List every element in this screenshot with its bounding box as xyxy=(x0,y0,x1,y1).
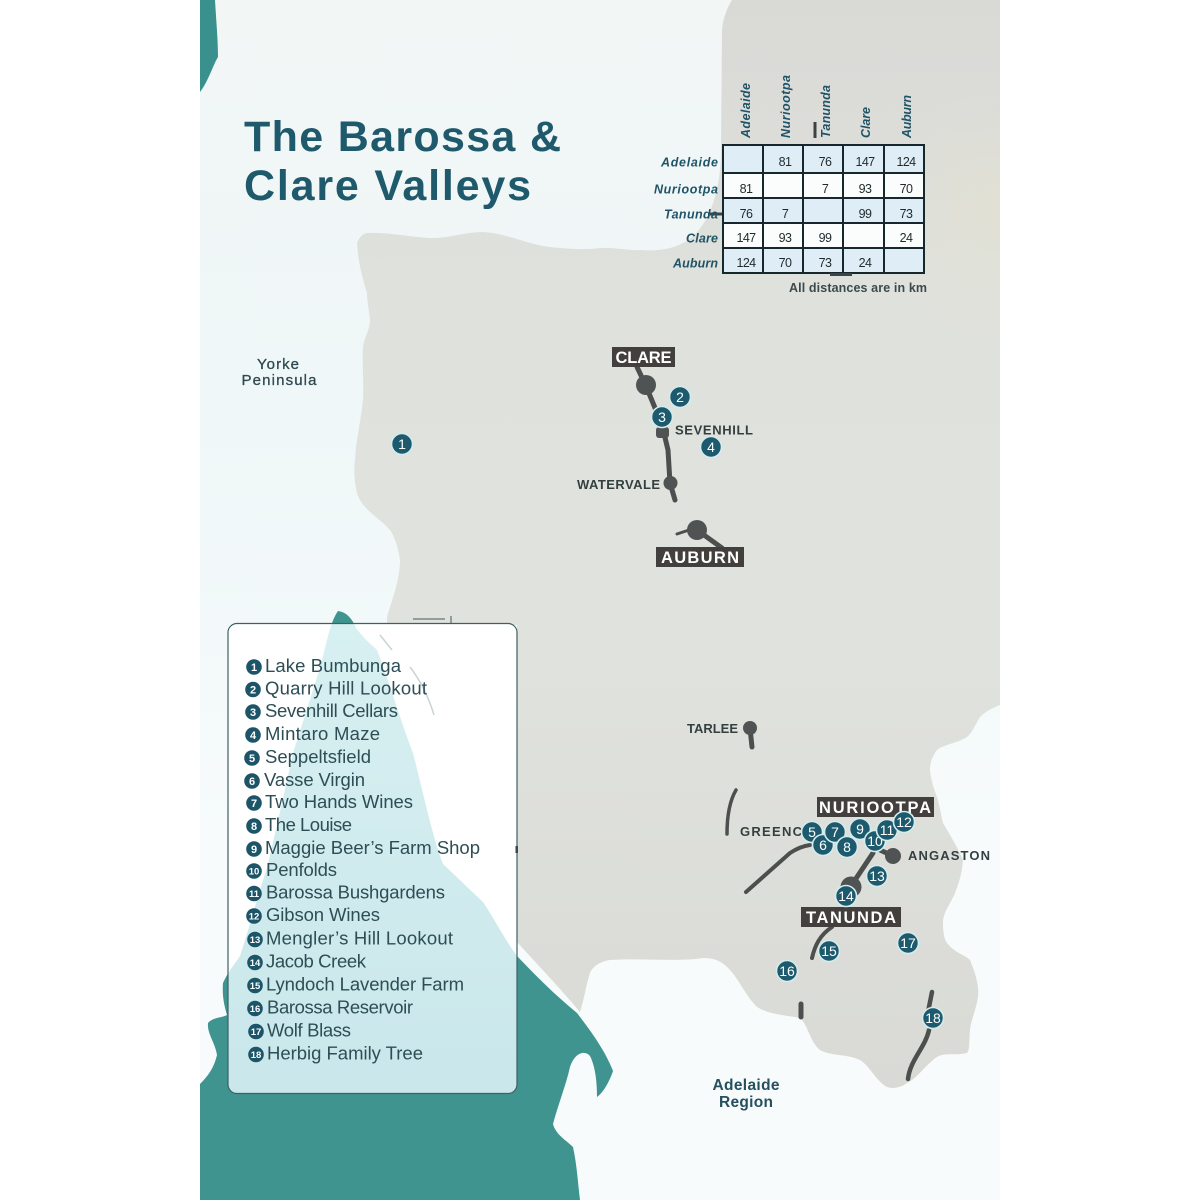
marker 18 xyxy=(922,1008,944,1028)
marker 13: 13 xyxy=(869,868,885,884)
legend item 8: The Louise xyxy=(265,814,352,835)
table values: 73 xyxy=(900,207,913,221)
legend item 17: 17 xyxy=(251,1027,261,1038)
beige tint on the land's right edge xyxy=(880,85,1120,345)
table values: 124 xyxy=(736,256,756,270)
legend item 18: Herbig Family Tree xyxy=(267,1042,423,1064)
marker 13 xyxy=(866,866,888,886)
marker 8 xyxy=(836,836,858,858)
column headers xyxy=(739,75,914,139)
table values: 7 xyxy=(822,182,829,196)
water: top-left corner xyxy=(200,0,218,92)
legend item 10: Penfolds xyxy=(266,859,337,880)
roads xyxy=(637,367,932,1079)
land: Barossa and Clare region xyxy=(354,0,1000,1088)
legend item 15: Lyndoch Lavender Farm xyxy=(266,974,464,994)
legend panel xyxy=(227,616,518,1094)
region label: Yorke Peninsula: Peninsula xyxy=(242,372,317,389)
table values xyxy=(736,155,916,270)
marker 1: 1 xyxy=(398,436,406,452)
marker 9 xyxy=(850,818,870,840)
marker 10: 10 xyxy=(867,833,883,849)
table note: All distances are in km xyxy=(789,281,927,295)
region label: Adelaide Region: Adelaide xyxy=(712,1077,780,1094)
column headers: Adelaide xyxy=(739,83,753,139)
marker 3: 3 xyxy=(658,409,666,425)
marker 2: 2 xyxy=(676,389,684,405)
marker 7: 7 xyxy=(831,824,839,840)
marker 4 xyxy=(700,436,722,458)
column headers: Nuriootpa xyxy=(779,75,793,138)
legend item 6: Vasse Virgin xyxy=(264,769,365,790)
marker 9: 9 xyxy=(856,821,864,837)
table row fills xyxy=(723,145,924,273)
town label: Auburn: AUBURN xyxy=(661,549,739,567)
map background xyxy=(200,0,1000,1200)
table values: 93 xyxy=(859,182,872,196)
marker 18: 18 xyxy=(925,1010,941,1026)
marker 14: 14 xyxy=(838,888,854,904)
legend item 16: Barossa Reservoir xyxy=(267,996,413,1018)
row headers: Nuriootpa xyxy=(654,182,718,196)
legend item 8: 8 xyxy=(251,821,257,833)
marker 2 xyxy=(670,386,690,408)
region label: Adelaide Region xyxy=(712,1077,780,1111)
legend item 13: 13 xyxy=(250,935,260,946)
column headers: Tanunda xyxy=(819,85,833,138)
marker 16: 16 xyxy=(779,963,795,979)
marker 17: 17 xyxy=(900,935,916,951)
legend item 6: 6 xyxy=(249,776,255,788)
town label: Tanunda: TANUNDA xyxy=(806,909,896,927)
title: Clare Valleys xyxy=(244,162,531,210)
title xyxy=(244,113,561,210)
table values: 73 xyxy=(819,256,832,270)
legend item 15: 15 xyxy=(250,981,261,992)
table values: 147 xyxy=(855,155,875,169)
table values: 124 xyxy=(896,155,916,169)
legend item 9: Maggie Beer’s Farm Shop xyxy=(265,837,480,858)
place label: Sevenhill: SEVENHILL xyxy=(675,422,753,438)
table values: 76 xyxy=(740,207,753,221)
table values: 7 xyxy=(782,207,789,221)
table values: 147 xyxy=(736,231,756,245)
marker 5: 5 xyxy=(808,824,816,840)
marker 17 xyxy=(898,932,918,954)
marker 10 xyxy=(864,830,886,852)
legend item 2: Quarry Hill Lookout xyxy=(265,678,427,698)
place label: Greenock: GREENC xyxy=(740,824,803,839)
legend item 1: Lake Bumbunga xyxy=(265,655,402,676)
legend item 4: Mintaro Maze xyxy=(265,723,380,744)
title: The Barossa & xyxy=(244,113,561,161)
region label: Yorke Peninsula xyxy=(242,356,317,389)
legend item 5: 5 xyxy=(249,753,255,765)
legend item 9: 9 xyxy=(251,844,257,856)
region label: Adelaide Region: Region xyxy=(719,1094,773,1111)
row headers: Adelaide xyxy=(660,156,718,170)
legend item 11: Barossa Bushgardens xyxy=(266,882,445,902)
legend item 17: Wolf Blass xyxy=(267,1020,351,1040)
marker 12: 12 xyxy=(896,814,912,830)
column headers: Clare xyxy=(859,107,873,138)
marker 4: 4 xyxy=(707,439,715,455)
table values: 24 xyxy=(900,231,913,245)
region label: Yorke Peninsula: Yorke xyxy=(257,356,299,373)
legend item 10: 10 xyxy=(249,866,259,878)
water: St Vincent gulf xyxy=(200,611,613,1200)
table values: 99 xyxy=(859,207,872,221)
place label: Angaston: ANGASTON xyxy=(908,848,990,863)
marker 15: 15 xyxy=(821,943,837,959)
marker 14 xyxy=(836,886,856,906)
table values: 81 xyxy=(740,182,753,196)
table values: 93 xyxy=(779,231,792,245)
legend item 14: Jacob Creek xyxy=(266,950,367,972)
legend item 7: Two Hands Wines xyxy=(265,791,413,812)
place label: Tarlee: TARLEE xyxy=(687,721,738,736)
town label: Clare: CLARE xyxy=(616,349,672,367)
marker 6: 6 xyxy=(819,837,827,853)
map markers xyxy=(392,386,944,1028)
legend item 13: Mengler’s Hill Lookout xyxy=(266,928,453,948)
row headers: Clare xyxy=(686,232,718,246)
column headers: Auburn xyxy=(900,95,914,139)
place label: Watervale: WATERVALE xyxy=(577,477,660,492)
distance table xyxy=(654,75,927,295)
table grid xyxy=(723,145,924,273)
marker 16 xyxy=(776,960,798,982)
marker 1 xyxy=(392,434,412,454)
table values: 76 xyxy=(819,155,832,169)
legend item 4: 4 xyxy=(250,730,257,742)
town label: Nuriootpa: NURIOOTPA xyxy=(819,799,931,817)
marker 15 xyxy=(818,940,840,962)
legend item 18: 18 xyxy=(251,1050,261,1061)
row headers: Tanunda xyxy=(664,208,718,222)
table values: 70 xyxy=(779,256,792,270)
road fragments under table xyxy=(708,122,852,274)
legend item 14: 14 xyxy=(250,958,261,969)
town dots xyxy=(636,375,901,898)
marker 3 xyxy=(652,406,672,428)
table values: 70 xyxy=(900,182,913,196)
row headers xyxy=(654,156,718,270)
row headers: Auburn xyxy=(672,256,718,270)
marker 8: 8 xyxy=(843,839,851,855)
legend item 11: 11 xyxy=(249,889,260,900)
legend item 7: 7 xyxy=(251,798,257,810)
marker 7 xyxy=(824,822,846,842)
legend item 3: Sevenhill Cellars xyxy=(265,700,398,721)
marker 11 xyxy=(876,820,898,840)
table values: 24 xyxy=(859,256,872,270)
table values: 81 xyxy=(779,155,792,169)
marker 6 xyxy=(812,834,834,856)
legend item 1: 1 xyxy=(251,662,257,674)
legend item 2: 2 xyxy=(250,684,256,696)
marker 12 xyxy=(894,812,914,832)
legend item 12: Gibson Wines xyxy=(266,904,380,925)
legend item 5: Seppeltsfield xyxy=(265,746,371,767)
legend item 3: 3 xyxy=(250,707,256,719)
legend item 12: 12 xyxy=(249,912,259,922)
legend item 16: 16 xyxy=(250,1004,260,1015)
marker 5 xyxy=(802,822,822,842)
marker 11: 11 xyxy=(880,822,894,838)
table values: 99 xyxy=(819,231,832,245)
